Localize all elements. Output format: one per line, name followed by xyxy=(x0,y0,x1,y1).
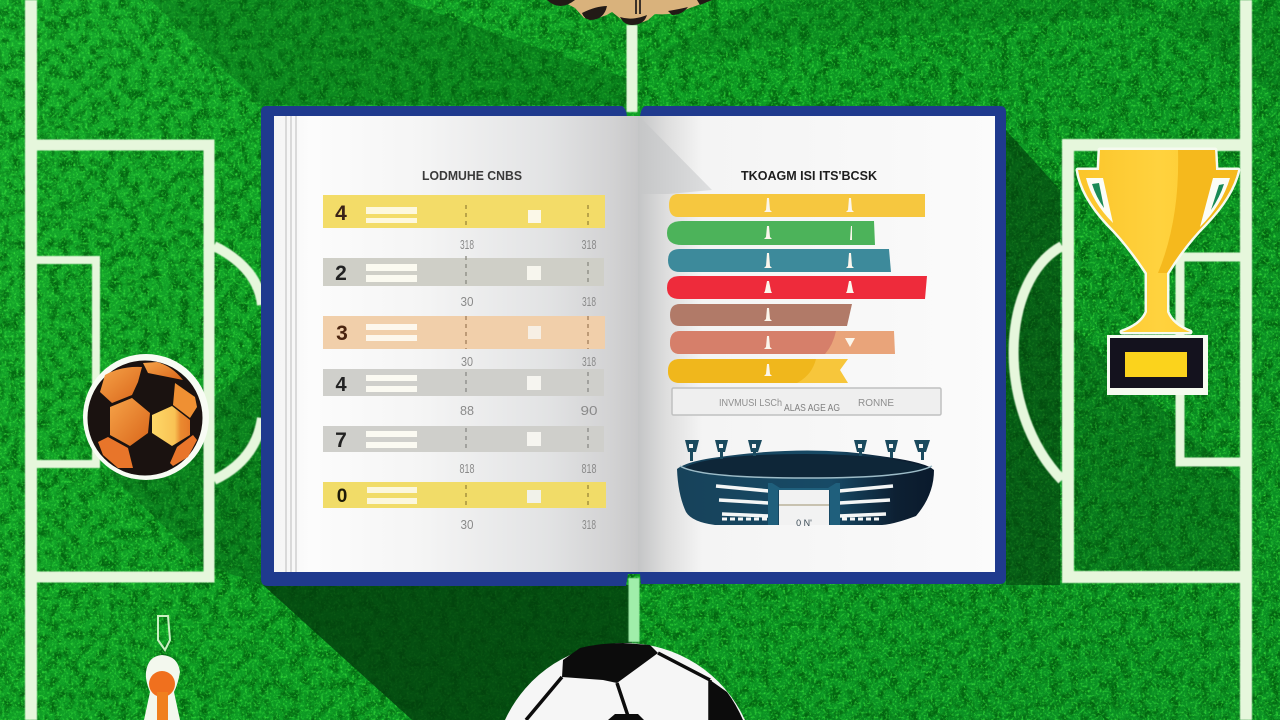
row 1: 4 xyxy=(335,202,347,225)
icon: badge at top edge xyxy=(547,0,712,25)
icon: orange football, left xyxy=(83,354,209,480)
row 5: 818 xyxy=(460,461,474,476)
icon: gold trophy xyxy=(1078,150,1238,395)
row 6: 0 xyxy=(337,486,347,507)
row 6: 318 xyxy=(582,517,596,532)
panel: left page table xyxy=(323,168,606,532)
heading: right page: TKOAGM ISI ITS'BCSK xyxy=(741,168,878,183)
bar chart xyxy=(667,194,927,383)
icon: stadium: 0 N' xyxy=(796,518,812,528)
caption box: INVMUSI LSCh xyxy=(719,398,782,409)
row 2: 318 xyxy=(582,294,596,309)
row 2: 30 xyxy=(460,294,474,309)
heading: left page: LODMUHE CNBS xyxy=(422,168,522,183)
caption box xyxy=(672,388,941,415)
row 3 xyxy=(323,316,605,369)
row 1: 318 xyxy=(460,237,474,252)
book xyxy=(261,106,1006,586)
row 5: 7 xyxy=(335,429,347,452)
icon: stadium xyxy=(677,440,934,528)
caption box: RONNE xyxy=(858,398,894,409)
caption box: ALAS AGE AG xyxy=(784,403,840,414)
icon: orange pin, bottom left xyxy=(144,616,180,720)
row 4: 88 xyxy=(460,403,474,418)
icon: black and white football, bottom xyxy=(505,643,745,720)
row 2 xyxy=(323,256,604,309)
floodlights xyxy=(685,440,930,461)
row 4: 4 xyxy=(335,374,347,396)
row 2: 2 xyxy=(335,262,347,285)
row 4: 90 xyxy=(580,403,598,418)
row 1 xyxy=(323,195,605,252)
row 3: 30 xyxy=(461,354,473,369)
row 3: 3 xyxy=(336,322,348,345)
row 6 xyxy=(323,482,606,532)
page edges xyxy=(286,116,296,572)
row 3: 318 xyxy=(582,354,596,369)
panel: right page bars xyxy=(667,168,941,528)
row 6: 30 xyxy=(460,517,474,532)
folded corner shading xyxy=(641,118,712,194)
left page xyxy=(274,116,638,572)
row 4 xyxy=(323,369,604,418)
bar ticks xyxy=(764,198,855,376)
row 5: 818 xyxy=(582,461,596,476)
row 1: 318 xyxy=(582,237,596,252)
row 5 xyxy=(323,426,604,476)
right page xyxy=(638,116,995,572)
book cover xyxy=(261,106,1006,586)
